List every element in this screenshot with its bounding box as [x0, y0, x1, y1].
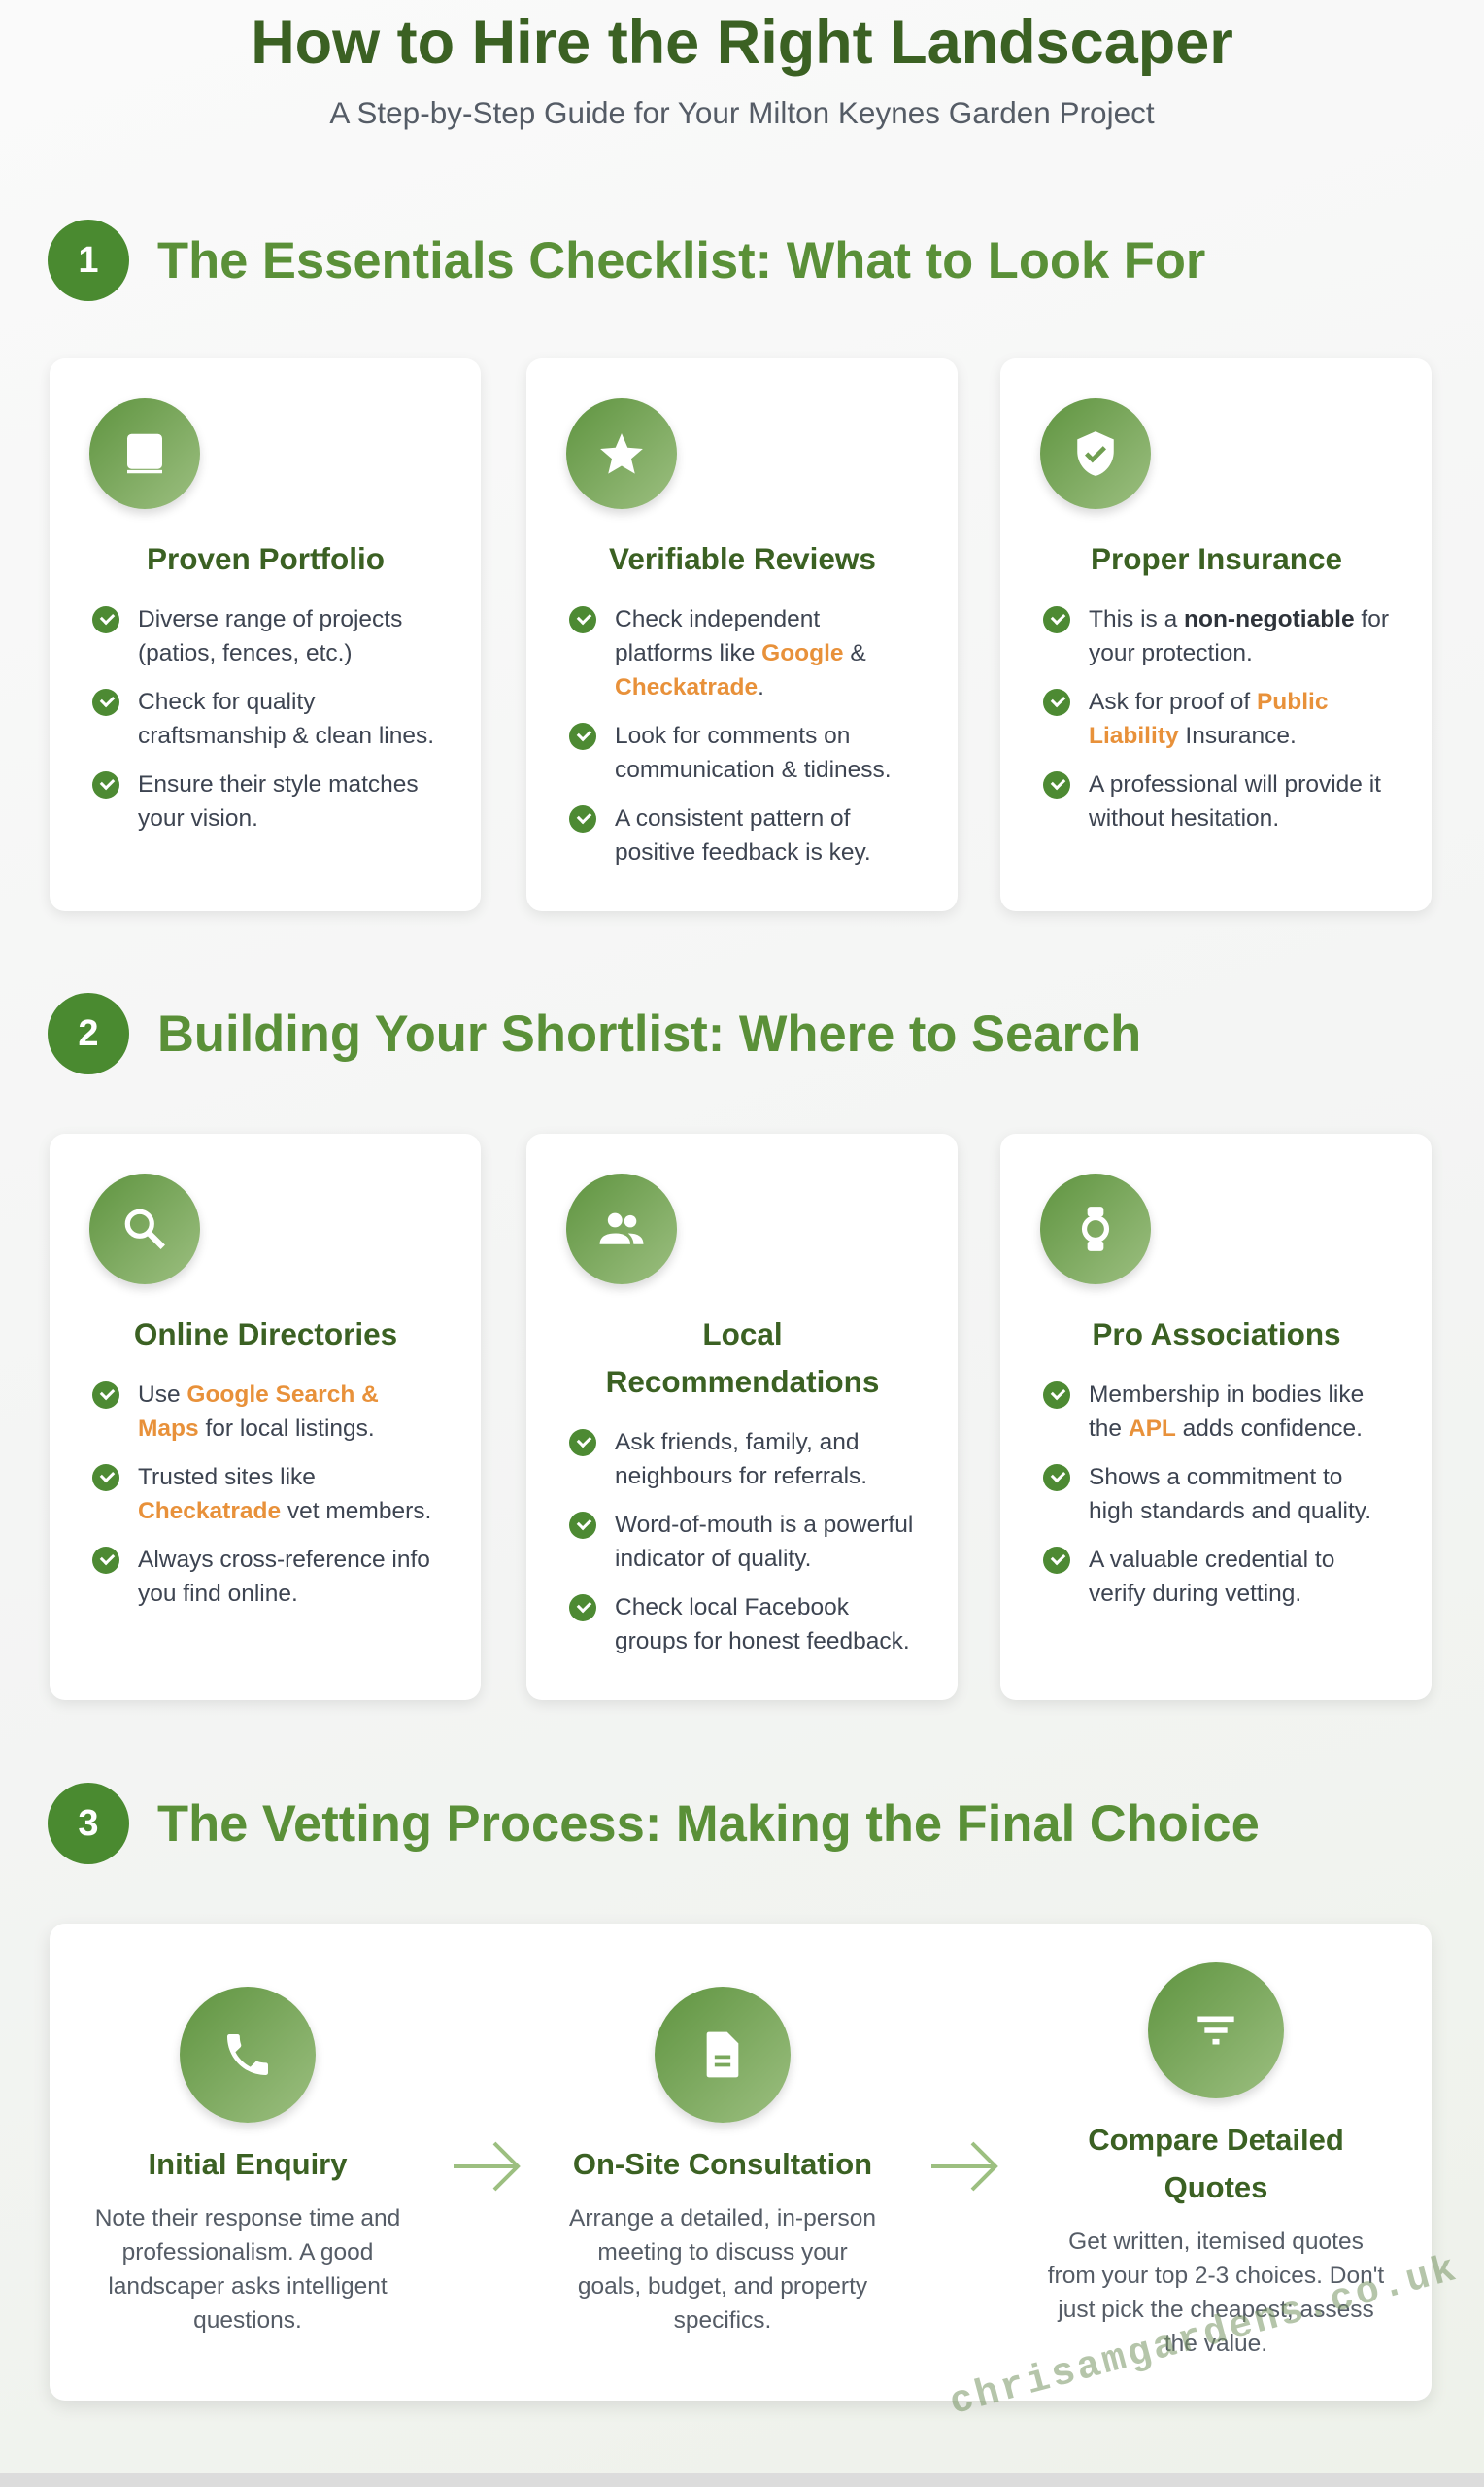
panel: pro associations: Shows a commitment to high standards and quality.: [1089, 1464, 1371, 1524]
watermark: chrisamgardens.co.uk: [945, 2248, 1464, 2426]
section 2 heading: 2: [78, 1012, 99, 1053]
icon: star: [566, 398, 677, 509]
panel: vetting process: [50, 1924, 1432, 2401]
subtitle: A Step-by-Step Guide for Your Milton Keynes Garden Project: [329, 95, 1155, 130]
section 1 heading: [48, 220, 1205, 301]
icon: search: [89, 1174, 200, 1284]
panel: verifiable reviews: [526, 358, 958, 911]
step: compare detailed quotes: [1048, 1962, 1384, 2357]
panel: proven portfolio: Diverse range of projects (patios, fences, etc.): [138, 606, 402, 666]
panel: proper insurance: A professional will provide it without hesitation.: [1089, 771, 1381, 832]
panel: pro associations: [1000, 1134, 1432, 1700]
section 1 heading: The Essentials Checklist: What to Look For: [157, 231, 1205, 290]
step: on-site consultation: [569, 1987, 876, 2334]
icon: watch: [1040, 1174, 1151, 1284]
arrow 2: [931, 2141, 998, 2192]
panel: verifiable reviews: A consistent pattern of positive feedback is key.: [615, 805, 871, 866]
step: initial enquiry: Initial Enquiry: [149, 2147, 347, 2181]
icon: filter: [1148, 1962, 1284, 2098]
section 1 heading: 1: [78, 239, 99, 280]
panel: pro associations: A valuable credential to verify during vetting.: [1089, 1547, 1334, 1607]
section 2 heading: Building Your Shortlist: Where to Search: [157, 1005, 1141, 1063]
icon: document: [655, 1987, 791, 2123]
step: initial enquiry: Note their response time and professionalism. A good landscaper asks intelligent questions.: [95, 2205, 400, 2334]
icon: phone: [180, 1987, 316, 2123]
arrow 1: [454, 2141, 521, 2192]
panel: proven portfolio: Ensure their style matches your vision.: [138, 771, 419, 832]
panel: pro associations: Membership in bodies like the APL adds confidence.: [1089, 1381, 1364, 1442]
title: How to Hire the Right Landscaper: [251, 9, 1233, 77]
section 3 heading: [48, 1783, 1260, 1864]
step: initial enquiry: [95, 1987, 400, 2334]
panel: local recommendations: Ask friends, family, and neighbours for referrals.: [615, 1429, 867, 1489]
panel: local recommendations: Check local Facebook groups for honest feedback.: [615, 1594, 910, 1654]
section 2 heading: [48, 993, 1141, 1074]
section 3 heading: The Vetting Process: Making the Final Choice: [157, 1795, 1260, 1852]
panel: online directories: Online Directories: [134, 1316, 397, 1351]
panel: local recommendations: Recommendations: [606, 1364, 879, 1399]
icon: people: [566, 1174, 677, 1284]
step: compare detailed quotes: Get written, itemised quotes from your top 2-3 choices. Don't just pick the cheapest; assess the value.: [1048, 2229, 1384, 2357]
panel: proven portfolio: Check for quality craftsmanship & clean lines.: [138, 689, 434, 749]
panel: verifiable reviews: Check independent platforms like Google & Checkatrade.: [615, 606, 866, 700]
step: compare detailed quotes: Compare Detailed: [1088, 2123, 1344, 2157]
panel: verifiable reviews: Verifiable Reviews: [609, 541, 876, 576]
panel: proven portfolio: Proven Portfolio: [147, 541, 385, 576]
panel: proper insurance: [1000, 358, 1432, 911]
icon: shield: [1040, 398, 1151, 509]
step: on-site consultation: On-Site Consultation: [573, 2147, 872, 2181]
icon: book: [89, 398, 200, 509]
panel: pro associations: Pro Associations: [1092, 1316, 1341, 1351]
panel: proper insurance: This is a non-negotiable for your protection.: [1089, 606, 1389, 666]
panel: local recommendations: Word-of-mouth is a powerful indicator of quality.: [615, 1512, 913, 1572]
panel: proper insurance: Ask for proof of Public Liability Insurance.: [1089, 689, 1328, 749]
panel: proven portfolio: [50, 358, 481, 911]
panel: online directories: [50, 1134, 481, 1700]
panel: online directories: Always cross-reference info you find online.: [138, 1547, 430, 1607]
panel: online directories: Use Google Search & Maps for local listings.: [138, 1381, 379, 1442]
panel: proper insurance: Proper Insurance: [1091, 541, 1342, 576]
section 3 heading: 3: [78, 1803, 99, 1844]
panel: online directories: Trusted sites like Checkatrade vet members.: [138, 1464, 431, 1524]
panel: local recommendations: [526, 1134, 958, 1700]
panel: local recommendations: Local: [702, 1316, 783, 1351]
step: compare detailed quotes: Quotes: [1164, 2170, 1267, 2204]
step: on-site consultation: Arrange a detailed, in-person meeting to discuss your goals, budget, and property specifics.: [569, 2205, 876, 2334]
panel: verifiable reviews: Look for comments on communication & tidiness.: [615, 723, 892, 783]
